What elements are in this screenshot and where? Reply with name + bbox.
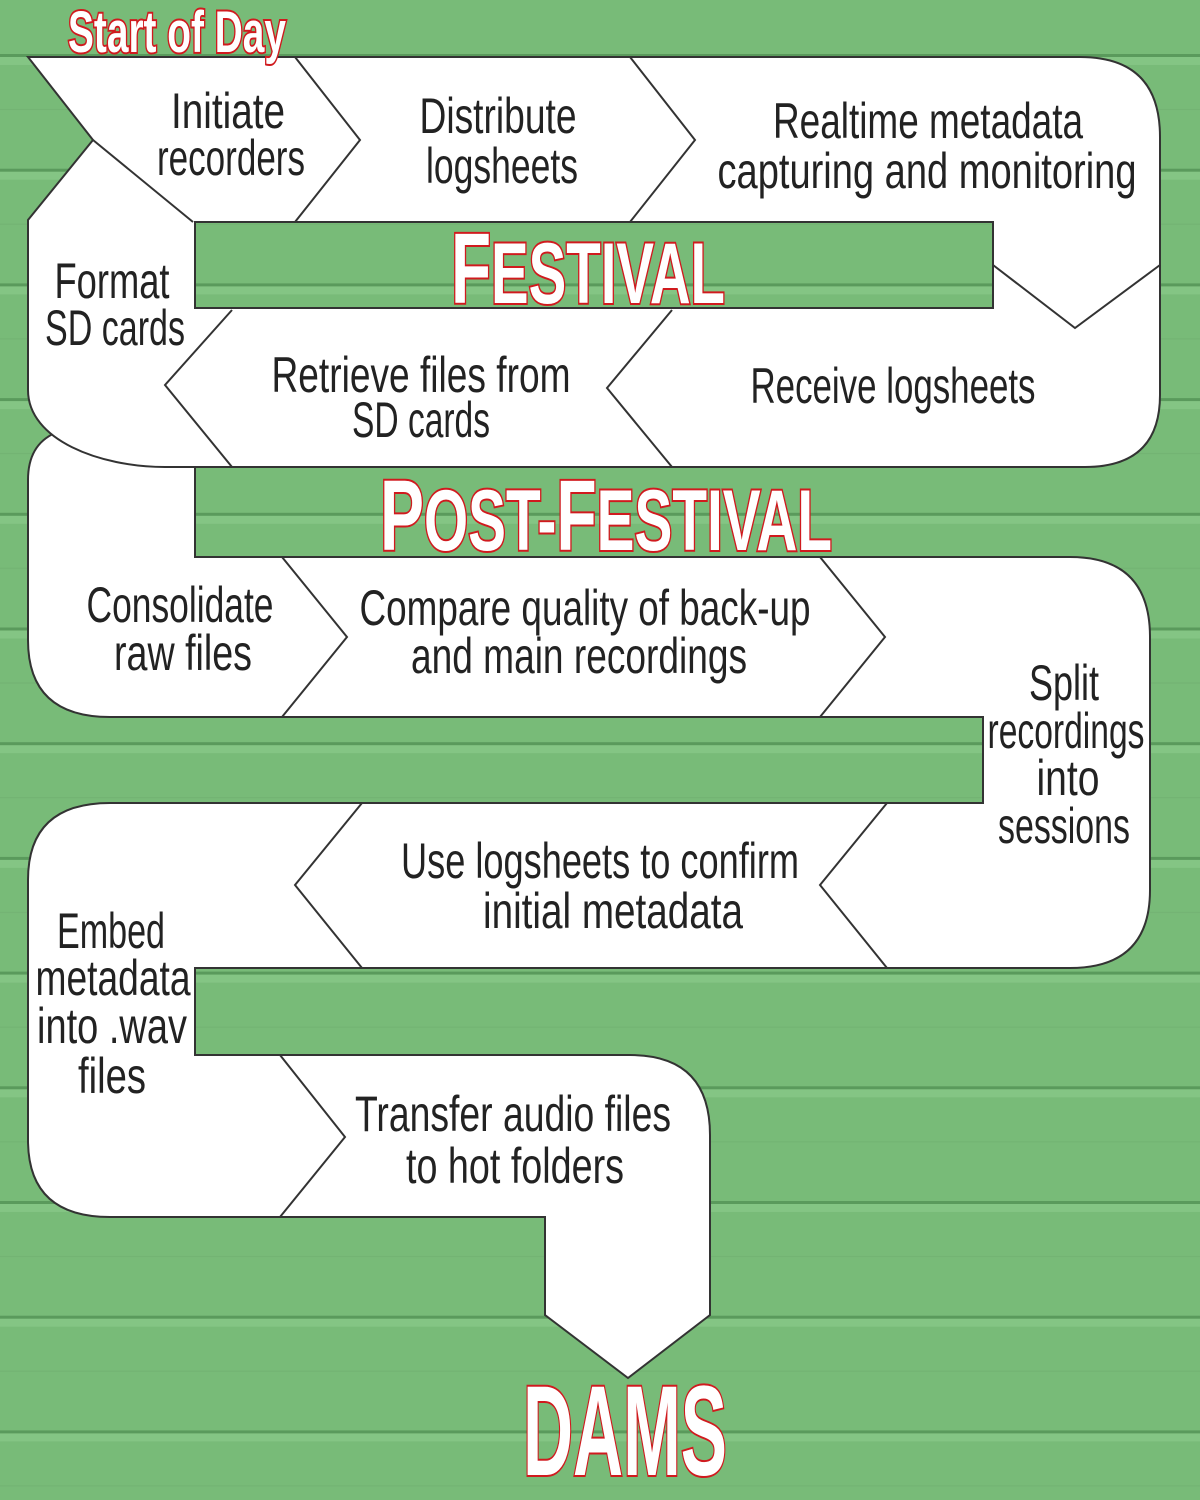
step: Split recordings: into bbox=[1036, 750, 1100, 806]
step: Distribute logsheets bbox=[420, 88, 578, 194]
ribbon: post-festival path bbox=[28, 433, 1150, 1378]
banner bar: festival bbox=[195, 222, 993, 308]
step: Format SD cards: Format bbox=[54, 253, 170, 309]
step: Distribute logsheets: Distribute bbox=[420, 88, 576, 144]
step: Use logsheets: initial metadata bbox=[483, 883, 743, 939]
step: Compare quality: and main recordings bbox=[411, 628, 747, 684]
heading: Festival: FESTIVAL bbox=[451, 213, 725, 325]
step: Realtime metadata: Realtime metadata bbox=[773, 93, 1083, 149]
step: Embed metadata: Embed bbox=[57, 903, 165, 959]
step: Split recordings: Split bbox=[1029, 655, 1099, 711]
step: Consolidate raw files bbox=[86, 577, 274, 681]
banner bar: post-festival bbox=[195, 469, 1200, 556]
ribbon: festival loop bbox=[28, 57, 1160, 467]
step: Transfer audio files: to hot folders bbox=[406, 1138, 624, 1194]
step: Use logsheets: Use logsheets to confirm bbox=[401, 833, 799, 889]
step: Compare quality bbox=[360, 580, 810, 684]
title: Start of Day: Start of Day bbox=[68, 0, 286, 65]
step: Consolidate raw files: raw files bbox=[114, 625, 252, 681]
step: Format SD cards bbox=[45, 253, 185, 356]
step: Distribute logsheets: logsheets bbox=[426, 138, 578, 194]
step: Transfer audio files: Transfer audio files bbox=[355, 1086, 671, 1142]
step: Initiate recorders: Initiate bbox=[171, 83, 285, 139]
step: Initiate recorders: recorders bbox=[157, 130, 305, 186]
step: Embed metadata: into .wav bbox=[37, 998, 187, 1054]
step: Retrieve files bbox=[272, 347, 570, 448]
step: Use logsheets bbox=[401, 833, 799, 939]
step: Embed metadata: files bbox=[78, 1048, 146, 1104]
heading: Post-Festival: POST-FESTIVAL bbox=[380, 460, 832, 572]
step: Retrieve files: SD cards bbox=[352, 392, 490, 448]
heading: DAMS: DAMS bbox=[523, 1360, 727, 1500]
step: Embed metadata: metadata bbox=[36, 950, 191, 1006]
step: Split recordings bbox=[988, 655, 1144, 854]
step: Consolidate raw files: Consolidate bbox=[86, 577, 274, 633]
step: Receive logsheets: Receive logsheets bbox=[750, 358, 1036, 414]
step: Format SD cards: SD cards bbox=[45, 300, 185, 356]
step: Transfer audio files bbox=[355, 1086, 671, 1194]
step: Embed metadata bbox=[36, 903, 191, 1104]
step: Initiate recorders bbox=[157, 83, 305, 186]
step: Realtime metadata bbox=[718, 93, 1136, 199]
step: Retrieve files: Retrieve files from bbox=[272, 347, 570, 403]
step: Compare quality: Compare quality of back-up bbox=[360, 580, 810, 636]
step: Split recordings: sessions bbox=[998, 798, 1130, 854]
